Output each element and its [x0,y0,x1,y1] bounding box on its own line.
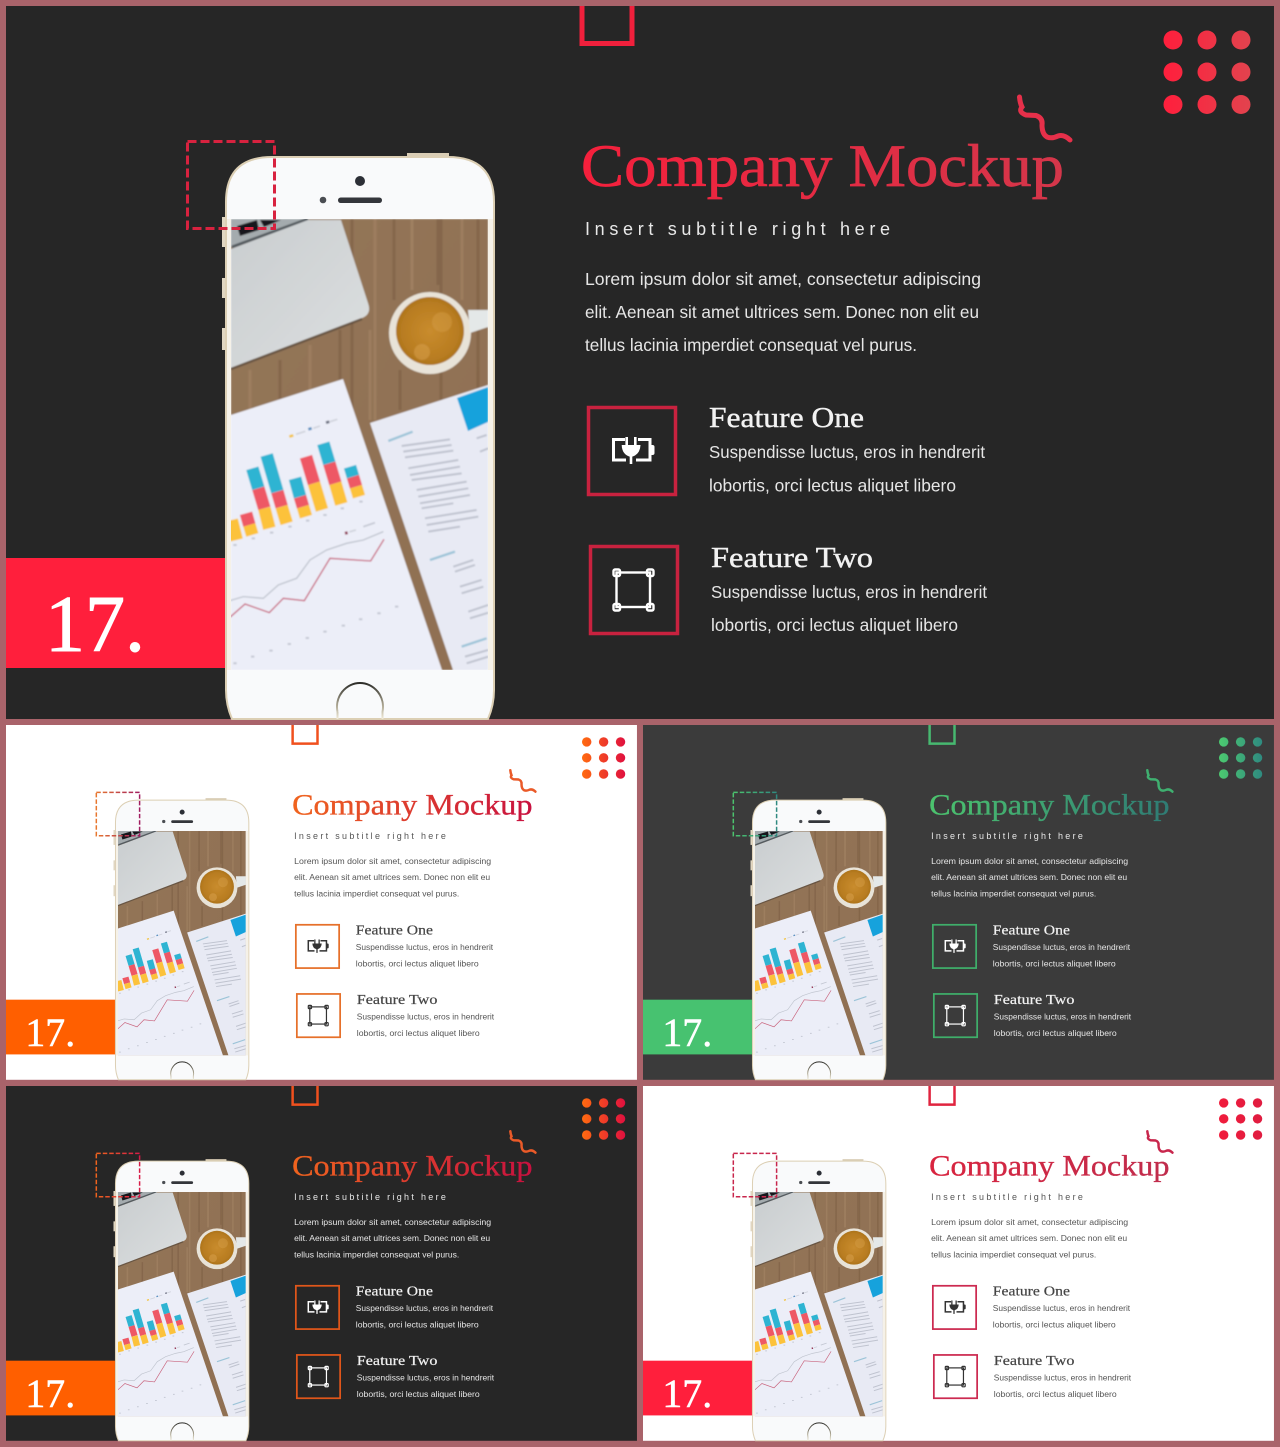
number band: 17. [662,1011,712,1055]
icon: phone mockup [113,1159,249,1441]
number band [6,558,225,669]
number band: 17. [45,581,145,669]
icon: phone mockup [750,798,886,1080]
number band [6,1361,115,1416]
title: Company Mockup [929,1150,1169,1183]
dot grid [582,737,625,779]
feature two: Feature Two [711,543,873,574]
dashed square accent [96,1153,140,1197]
body text: tellus lacinia imperdiet consequat vel purus. [931,1250,1096,1260]
feature one: Feature One [993,1284,1070,1299]
dot grid [1219,737,1262,779]
feature two: Suspendisse luctus, eros in hendrerit [357,1373,495,1383]
number band [643,1361,752,1416]
slide background [6,725,637,1080]
feature two [590,543,987,635]
feature one [933,1284,1131,1330]
squiggle [1147,1131,1172,1153]
body text: Lorem ipsum dolor sit amet, consectetur adipiscing [294,1217,491,1227]
top square accent [582,6,632,44]
feature two [297,1354,495,1399]
feature two: lobortis, orci lectus aliquet libero [711,615,958,635]
body text: tellus lacinia imperdiet consequat vel purus. [294,1250,459,1260]
slide background [643,1086,1274,1441]
feature one: Feature One [993,923,1070,938]
feature two: Suspendisse luctus, eros in hendrerit [711,582,987,602]
feature two [934,993,1132,1038]
number band [643,1000,752,1055]
feature one [588,403,985,496]
feature one: lobortis, orci lectus aliquet libero [993,959,1116,969]
body text: Lorem ipsum dolor sit amet, consectetur adipiscing [294,856,491,866]
body text [294,1217,491,1260]
number band: 17. [25,1372,75,1416]
dashed square accent [733,792,777,836]
feature one: Suspendisse luctus, eros in hendrerit [993,1303,1131,1313]
body text [931,856,1128,899]
title: Company Mockup [929,789,1169,822]
number band: 17. [662,1372,712,1416]
icon: phone mockup [222,153,494,719]
squiggle [1147,770,1172,792]
body text: tellus lacinia imperdiet consequat vel purus. [294,889,459,899]
dashed square accent [188,142,274,228]
slide background [6,6,1274,719]
body text: elit. Aenean sit amet ultrices sem. Donec non elit eu [931,872,1127,882]
feature one: lobortis, orci lectus aliquet libero [993,1320,1116,1330]
subtitle: Insert subtitle right here [294,1192,446,1202]
dashed square accent [733,1153,777,1197]
feature two: Suspendisse luctus, eros in hendrerit [357,1012,495,1022]
body text: Lorem ipsum dolor sit amet, consectetur adipiscing [931,1217,1128,1227]
feature one: lobortis, orci lectus aliquet libero [356,1320,479,1330]
body text: elit. Aenean sit amet ultrices sem. Donec non elit eu [585,302,979,322]
feature two: lobortis, orci lectus aliquet libero [994,1389,1117,1399]
top square accent [930,1086,954,1105]
dashed square accent [96,792,140,836]
feature one: lobortis, orci lectus aliquet libero [356,959,479,969]
body text: elit. Aenean sit amet ultrices sem. Donec non elit eu [294,872,490,882]
feature one [296,1284,494,1330]
feature one: Feature One [356,923,433,938]
feature two [297,993,495,1038]
panel: white red slide [643,1086,1274,1441]
body text [294,856,491,899]
feature one [296,923,494,969]
body text [585,269,981,355]
dot grid [1164,30,1250,114]
icon: phone mockup [113,798,249,1080]
feature two: Feature Two [357,1354,437,1369]
icon: phone mockup [750,1159,886,1441]
feature two: Feature Two [994,993,1074,1008]
title: Company Mockup [292,789,532,822]
feature one [933,923,1131,969]
feature two: lobortis, orci lectus aliquet libero [357,1028,480,1038]
slide background [6,1086,637,1441]
top square accent [293,725,317,744]
feature one: Suspendisse luctus, eros in hendrerit [993,942,1131,952]
title: Company Mockup [581,133,1064,199]
feature one: Suspendisse luctus, eros in hendrerit [709,442,985,462]
dot grid [582,1098,625,1140]
slide background [643,725,1274,1080]
subtitle: Insert subtitle right here [931,831,1083,841]
feature two: Feature Two [357,993,437,1008]
panel: grey green slide [643,725,1274,1080]
body text: elit. Aenean sit amet ultrices sem. Donec non elit eu [294,1233,490,1243]
feature one: Suspendisse luctus, eros in hendrerit [356,1303,494,1313]
top square accent [930,725,954,744]
number band [6,1000,115,1055]
body text: Lorem ipsum dolor sit amet, consectetur adipiscing [931,856,1128,866]
body text [931,1217,1128,1260]
subtitle: Insert subtitle right here [294,831,446,841]
feature one: lobortis, orci lectus aliquet libero [709,476,956,496]
dot grid [1219,1098,1262,1140]
number band: 17. [25,1011,75,1055]
body text: tellus lacinia imperdiet consequat vel purus. [931,889,1096,899]
feature two: Suspendisse luctus, eros in hendrerit [994,1012,1132,1022]
body text: elit. Aenean sit amet ultrices sem. Donec non elit eu [931,1233,1127,1243]
body text: Lorem ipsum dolor sit amet, consectetur adipiscing [585,269,981,289]
subtitle: Insert subtitle right here [931,1192,1083,1202]
body text: tellus lacinia imperdiet consequat vel purus. [585,335,917,355]
squiggle [1020,97,1070,140]
feature one: Suspendisse luctus, eros in hendrerit [356,942,494,952]
subtitle: Insert subtitle right here [585,219,890,239]
feature two: Feature Two [994,1354,1074,1369]
panel: white orange slide [6,725,637,1080]
panel: large dark red slide [6,6,1274,719]
feature one: Feature One [709,403,864,434]
feature two: lobortis, orci lectus aliquet libero [994,1028,1117,1038]
squiggle [510,1131,535,1153]
feature two: Suspendisse luctus, eros in hendrerit [994,1373,1132,1383]
feature two: lobortis, orci lectus aliquet libero [357,1389,480,1399]
feature one: Feature One [356,1284,433,1299]
panel: dark orange slide [6,1086,637,1441]
top square accent [293,1086,317,1105]
feature two [934,1354,1132,1399]
title: Company Mockup [292,1150,532,1183]
squiggle [510,770,535,792]
